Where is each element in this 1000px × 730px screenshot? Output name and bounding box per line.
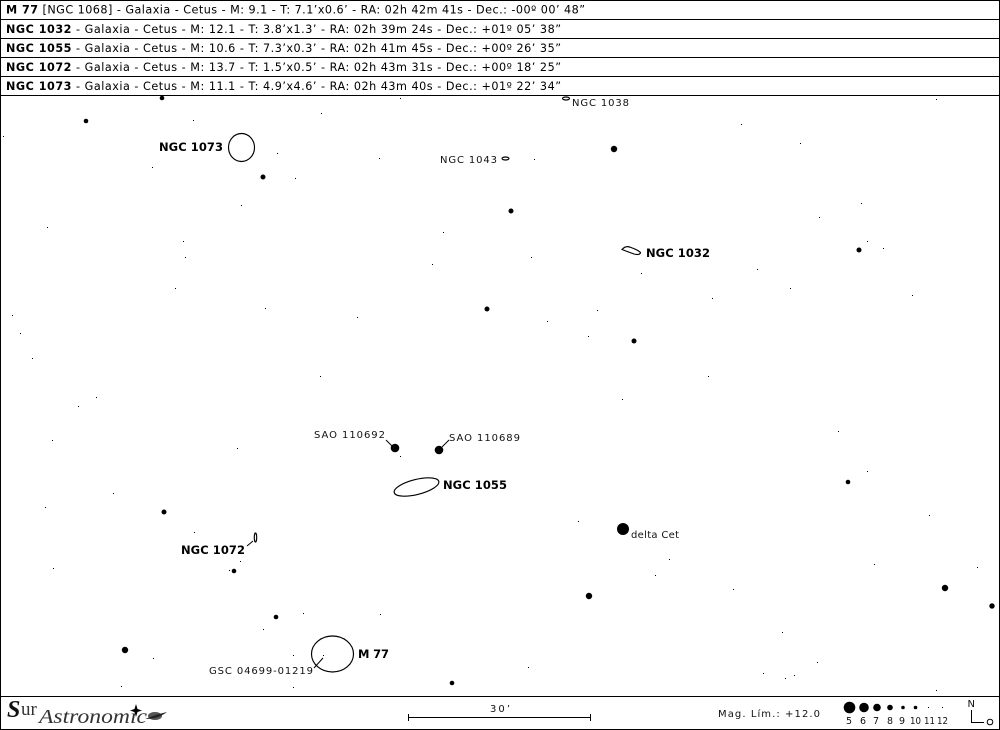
legend: star magnitudes: 10 — [910, 716, 921, 727]
legend: star magnitudes: 7 — [873, 716, 879, 727]
legend: star magnitudes: 11 — [924, 716, 935, 727]
label: M 77: M 77 — [358, 647, 389, 661]
table row: NGC 1072: NGC 1072 - Galaxia - Cetus - M: 13.7 - T: 1.5’x0.5’ - RA: 02h 43m 31s - Dec.: +00º 18’ 25” — [6, 61, 561, 74]
table row: NGC 1032: NGC 1032 - Galaxia - Cetus - M: 12.1 - T: 3.8’x1.3’ - RA: 02h 39m 24s - Dec.: +01º 05’ 38” — [6, 23, 561, 36]
label: NGC 1072: NGC 1072 — [181, 543, 245, 557]
galaxy: NGC 1032 — [622, 246, 710, 260]
star label: delta Cet: delta Cet — [631, 530, 679, 541]
logo: SurAstronomia — [7, 697, 167, 728]
legend: star magnitudes: 9 — [899, 716, 905, 727]
label: NGC 1055: NGC 1055 — [443, 478, 507, 492]
logo: SurAstronomia: ur — [21, 699, 38, 720]
legend: star magnitudes: 5 — [846, 716, 852, 727]
galaxy: M 77 — [209, 636, 389, 677]
icon: planet — [145, 712, 167, 720]
legend: star magnitudes: 12 — [937, 716, 948, 727]
table row: NGC 1055: NGC 1055 - Galaxia - Cetus - M: 10.6 - T: 7.3’x0.3’ - RA: 02h 41m 45s - Dec.: +00º 26’ 35” — [6, 42, 561, 55]
panel: object data table — [0, 4, 1000, 96]
star field: faint stars — [3, 98, 978, 691]
scale bar: 30 arcmin: 30’ — [490, 704, 510, 715]
galaxy: NGC 1043 — [440, 155, 509, 166]
star field: bright stars — [84, 96, 995, 685]
galaxy: NGC 1055 — [392, 474, 507, 500]
compass: north and east: N — [968, 699, 975, 710]
logo: SurAstronomia: Astronomic — [37, 706, 147, 728]
icon: star — [130, 704, 142, 717]
limiting magnitude: Mag. Lím.: +12.0 — [718, 708, 820, 720]
table row: M 77: M 77 [NGC 1068] - Galaxia - Cetus - M: 9.1 - T: 7.1’x0.6’ - RA: 02h 42m 41s - Dec.: -00º 00’ 48” — [6, 4, 585, 16]
label: GSC 04699-01219: GSC 04699-01219 — [209, 666, 313, 677]
label: NGC 1043: NGC 1043 — [440, 155, 497, 166]
label: NGC 1038: NGC 1038 — [572, 98, 629, 109]
label: NGC 1073: NGC 1073 — [159, 140, 223, 154]
legend: star magnitudes: 6 — [860, 716, 866, 727]
star label: SAO 110692 — [314, 430, 392, 446]
legend: star magnitudes: 8 — [887, 716, 893, 727]
galaxy: NGC 1073 — [159, 134, 254, 162]
galaxy: NGC 1038 — [562, 97, 629, 109]
galaxy: NGC 1072 — [181, 533, 257, 557]
table row: NGC 1073: NGC 1073 - Galaxia - Cetus - M: 11.1 - T: 4.9’x4.6’ - RA: 02h 43m 40s - Dec.: +01º 22’ 34” — [6, 80, 561, 93]
compass: north and east — [968, 699, 993, 725]
footer divider — [0, 696, 1000, 698]
star label: SAO 110689: SAO 110689 — [449, 433, 520, 444]
logo: SurAstronomia: S — [7, 697, 20, 723]
legend: star magnitudes — [844, 702, 948, 727]
star label: SAO 110692: SAO 110692 — [314, 430, 385, 441]
label: NGC 1032: NGC 1032 — [646, 246, 710, 260]
